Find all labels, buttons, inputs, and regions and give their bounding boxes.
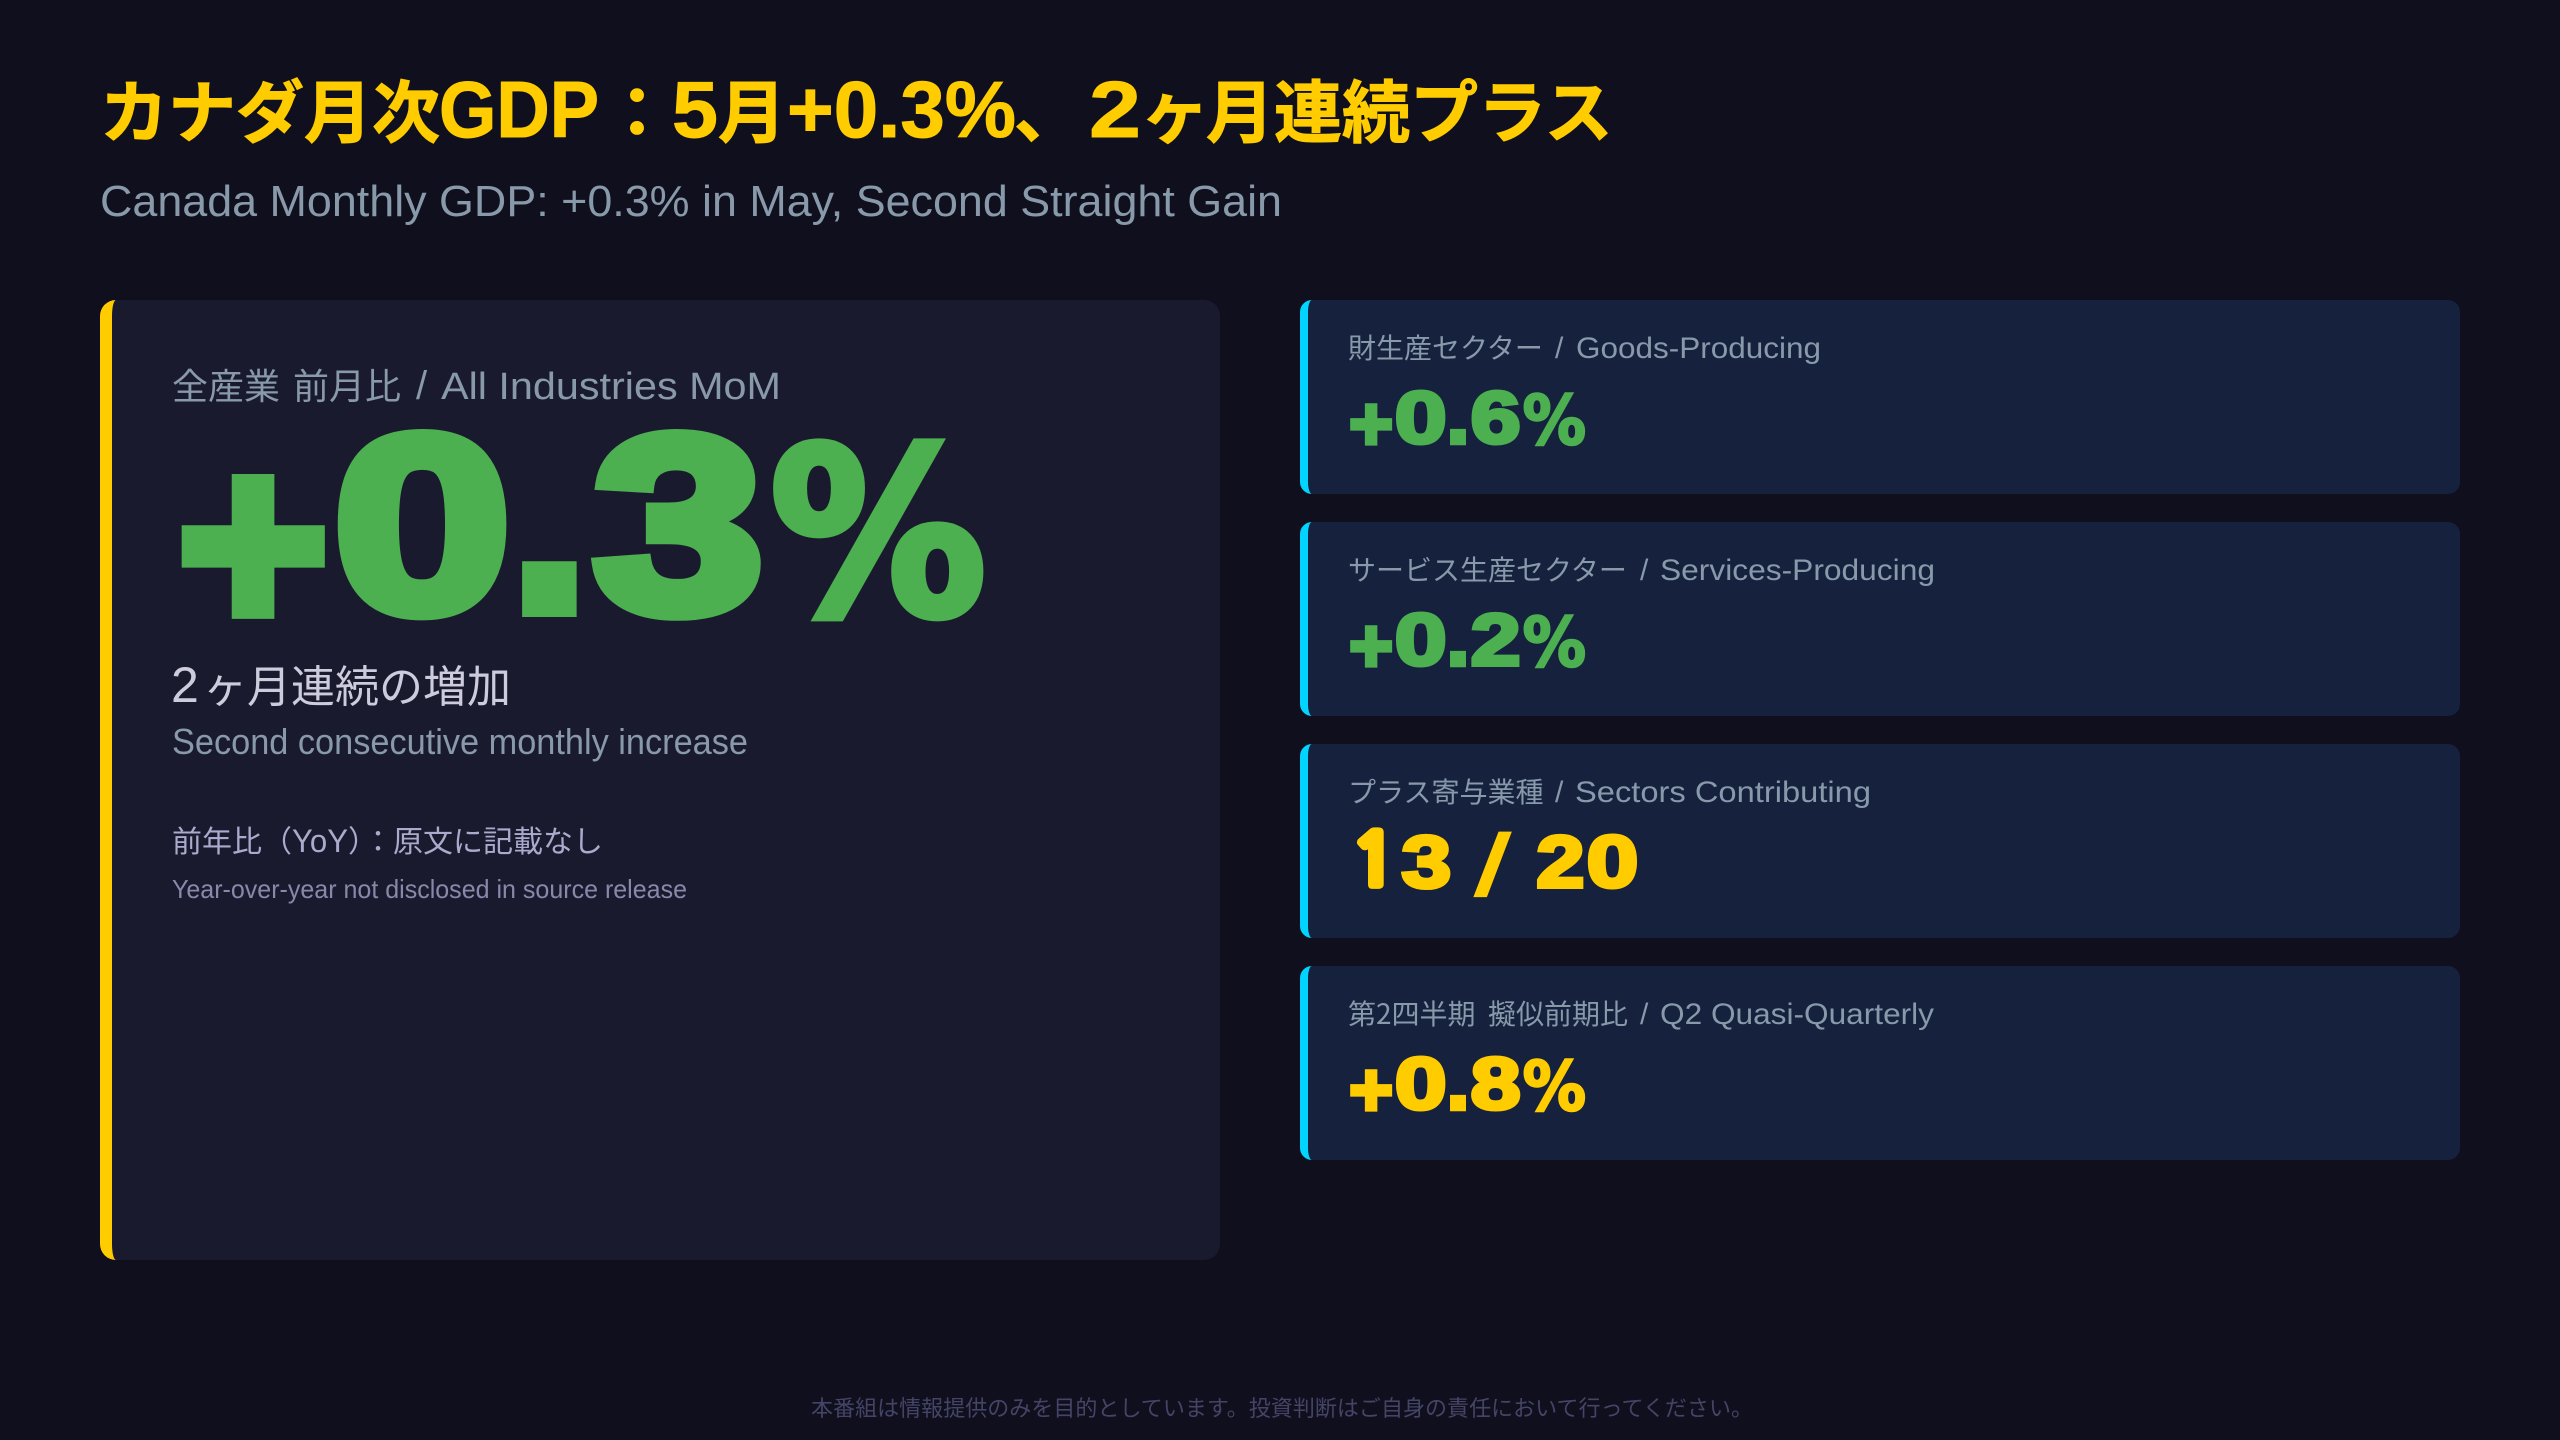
card value: 0: [1395, 1043, 1447, 1125]
title: 、: [1014, 58, 1082, 157]
card label: /: [1640, 554, 1649, 587]
card background: [1300, 744, 2460, 938]
card background: [1300, 300, 2460, 494]
card label: サービス生産セクター: [1348, 549, 1627, 589]
year over year note Japanese: [172, 817, 603, 861]
panel label: 前月比: [293, 358, 401, 410]
card label: Sectors Contributing: [1575, 776, 1871, 809]
title: ：: [603, 58, 671, 157]
card value: +: [1349, 381, 1393, 465]
panel accent border: [100, 300, 116, 1260]
card: Q2 quasi-quarterly: [1300, 966, 2460, 1160]
panel label: 全産業: [172, 358, 280, 410]
card value: %: [1523, 604, 1586, 683]
card label: 第2四半期: [1348, 993, 1476, 1033]
headline note English: Second consecutive monthly increase: [172, 721, 748, 762]
card: sectors contributing: [1300, 744, 2460, 938]
headline note Japanese: 2: [171, 657, 199, 713]
card label: [1348, 549, 1935, 589]
card value: .: [1447, 593, 1469, 683]
card accent border: [1300, 522, 1312, 716]
card value: [1349, 371, 1586, 465]
panel label: All Industries MoM: [441, 366, 781, 408]
subtitle: Canada Monthly GDP: +0.3% in May, Second Straight Gain: [100, 177, 1282, 226]
headline value: +: [178, 400, 328, 687]
card value: %: [1523, 1048, 1586, 1127]
panel label: [172, 358, 781, 410]
headline value: .: [511, 364, 588, 668]
headline note Japanese: 月連続の増加: [247, 651, 511, 715]
card value: [1349, 1037, 1586, 1131]
headline value: 0: [334, 384, 511, 664]
card accent border: [1300, 966, 1312, 1160]
year over year note Japanese: 前年比（: [172, 817, 292, 861]
title: 5: [672, 65, 718, 154]
card value: +: [1349, 1047, 1393, 1131]
card value: 0: [1395, 377, 1447, 459]
card background: [1300, 966, 2460, 1160]
card label: 財生産セクター: [1348, 327, 1543, 367]
panel: all industries month over month: [100, 300, 1220, 1260]
card value: 0: [1395, 599, 1447, 681]
year over year note Japanese: ）：原文に記載なし: [348, 817, 603, 861]
card label: [1348, 771, 1871, 811]
card label: /: [1640, 998, 1649, 1031]
card value: /: [1476, 818, 1510, 914]
card label: /: [1555, 332, 1564, 365]
card value: 0: [1587, 820, 1638, 903]
title: 2: [1089, 65, 1141, 154]
card accent border: [1300, 744, 1312, 938]
card label: /: [1555, 776, 1564, 809]
headline value: %: [770, 399, 986, 669]
title: +0.3%: [787, 65, 1016, 154]
title: 月: [718, 58, 786, 157]
title: ヶ: [1141, 58, 1209, 157]
title: [100, 58, 1613, 157]
headline value: [178, 364, 986, 687]
card value: 1: [1351, 826, 1398, 897]
title: 月連続プラス: [1206, 58, 1613, 157]
footer disclaimer: 本番組は情報提供のみを目的としています。投資判断はご自身の責任において行ってください。: [811, 1391, 1753, 1423]
card value: +: [1349, 603, 1393, 687]
card value: %: [1523, 382, 1586, 461]
title: GDP: [439, 65, 599, 154]
card background: [1300, 522, 2460, 716]
card value: 8: [1471, 1044, 1521, 1125]
card label: プラス寄与業種: [1348, 771, 1543, 811]
card label: [1348, 993, 1934, 1033]
card value: 6: [1471, 378, 1521, 459]
year over year note English: Year-over-year not disclosed in source release: [172, 874, 687, 904]
card value: 2: [1471, 600, 1521, 681]
card accent border: [1300, 300, 1312, 494]
card value: 2: [1536, 820, 1584, 903]
year over year note Japanese: YoY: [292, 823, 348, 859]
card value: [1351, 818, 1638, 914]
card label: Goods-Producing: [1576, 332, 1821, 365]
headline note Japanese: ヶ: [203, 651, 247, 715]
card label: Q2 Quasi-Quarterly: [1660, 998, 1934, 1031]
card value: .: [1447, 1037, 1469, 1127]
headline value: 3: [593, 385, 763, 665]
card value: [1349, 593, 1586, 687]
card: goods-producing: [1300, 300, 2460, 494]
card label: 擬似前期比: [1488, 993, 1628, 1033]
panel label: /: [416, 364, 428, 408]
title: カナダ月次: [100, 58, 440, 157]
card: services-producing: [1300, 522, 2460, 716]
card value: .: [1447, 371, 1469, 461]
panel background: [100, 300, 1220, 1260]
card label: [1348, 327, 1821, 367]
card label: Services-Producing: [1660, 554, 1935, 587]
card value: 3: [1402, 822, 1451, 903]
